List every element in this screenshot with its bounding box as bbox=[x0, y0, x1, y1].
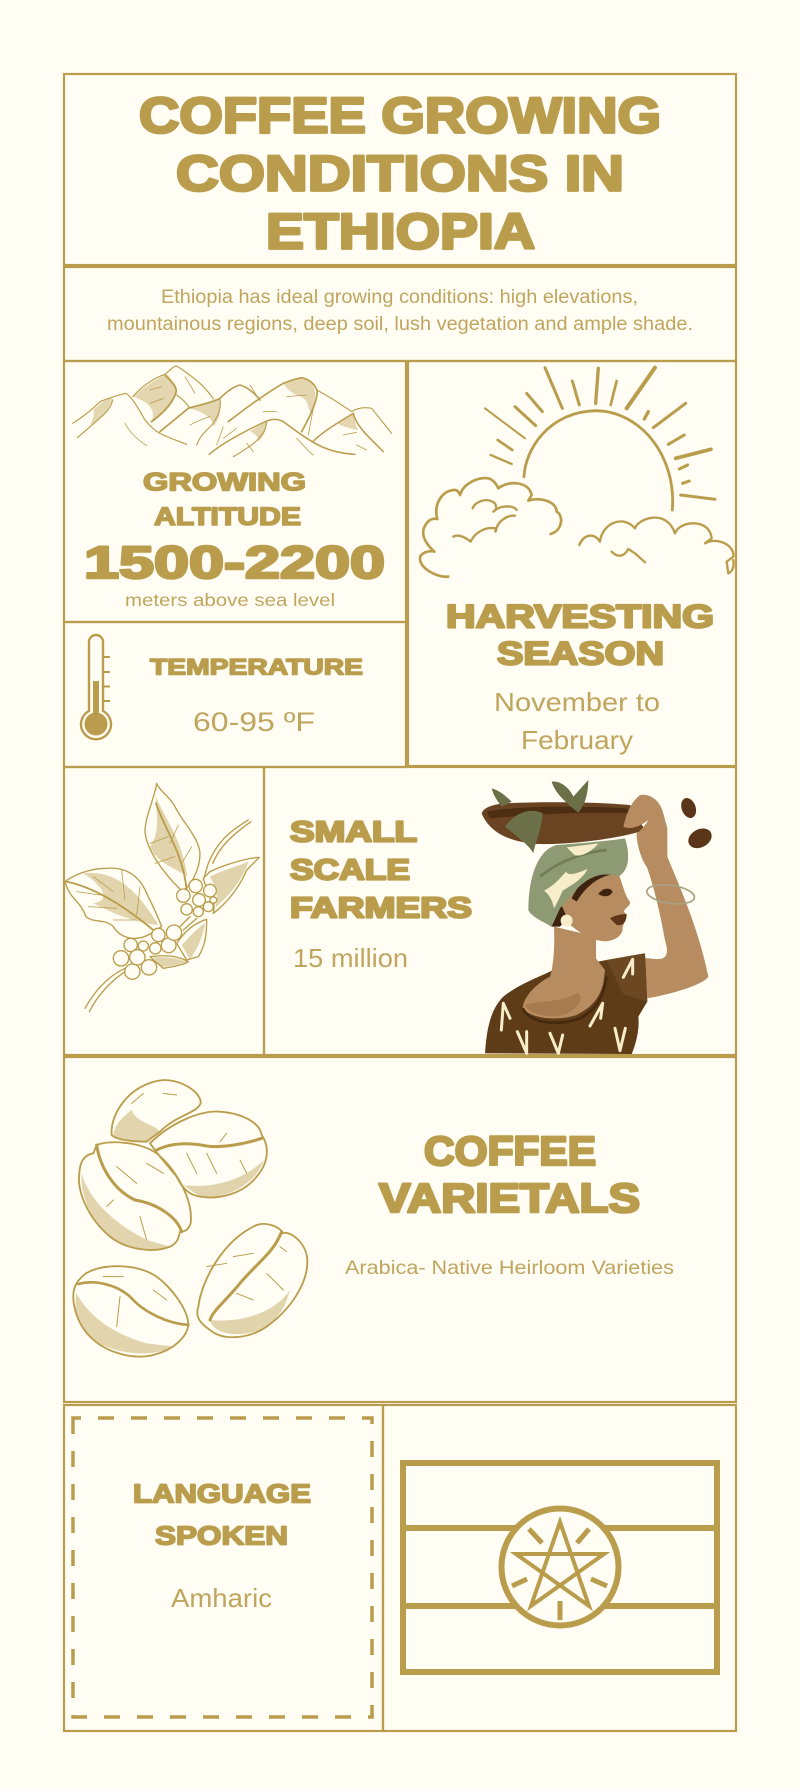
heading: harvesting season: HARVESTING bbox=[446, 598, 714, 634]
heading: coffee varietals: VARIETALS bbox=[379, 1175, 640, 1221]
value: number of farmers: 15 million bbox=[293, 943, 408, 973]
dashed inner frame bbox=[73, 1418, 372, 1717]
heading: language spoken: SPOKEN bbox=[155, 1520, 288, 1550]
heading: coffee varietals bbox=[379, 1128, 640, 1221]
icon: thermometer bbox=[81, 635, 111, 739]
panel: temperature bbox=[64, 622, 406, 767]
panel: title bbox=[64, 74, 736, 265]
heading: language spoken: LANGUAGE bbox=[133, 1478, 311, 1508]
panel: language spoken bbox=[64, 1405, 383, 1731]
heading: small scale farmers bbox=[290, 816, 472, 924]
title bbox=[139, 88, 661, 260]
icon: mountains bbox=[73, 366, 392, 457]
intro text bbox=[107, 287, 693, 335]
heading: small scale farmers: SMALL bbox=[290, 816, 417, 848]
heading: harvesting season: SEASON bbox=[497, 636, 664, 672]
icon: coffee beans bbox=[73, 1080, 307, 1357]
illustration: woman carrying coffee basket bbox=[482, 780, 715, 1054]
panel: coffee branch bbox=[64, 767, 264, 1055]
value: harvest months: November to bbox=[494, 687, 660, 717]
value: temperature range: 60-95 ºF bbox=[193, 707, 315, 737]
caption: altitude unit: meters above sea level bbox=[125, 590, 335, 610]
panel: ethiopian flag bbox=[383, 1405, 736, 1731]
intro text: Ethiopia has ideal growing conditions: high elevations, bbox=[161, 287, 638, 308]
panel: coffee varietals bbox=[64, 1057, 736, 1402]
value: varieties: Arabica- Native Heirloom Varieties bbox=[345, 1257, 674, 1279]
value: language: Amharic bbox=[171, 1583, 272, 1613]
title: COFFEE GROWING bbox=[139, 88, 661, 144]
heading: language spoken bbox=[133, 1478, 311, 1550]
heading: small scale farmers: SCALE bbox=[290, 854, 410, 886]
heading: harvesting season bbox=[446, 598, 714, 672]
icon: coffee branch bbox=[65, 783, 259, 1012]
panel: small scale farmers bbox=[264, 767, 736, 1055]
heading: temperature: TEMPERATURE bbox=[150, 654, 363, 680]
intro text: mountainous regions, deep soil, lush vegetation and ample shade. bbox=[107, 314, 693, 335]
value: altitude range: 1500-2200 bbox=[84, 537, 385, 588]
value: harvest months: February bbox=[521, 725, 633, 755]
heading: growing altitude bbox=[143, 468, 306, 531]
heading: small scale farmers: FARMERS bbox=[290, 892, 472, 924]
value: harvest months bbox=[494, 687, 660, 755]
heading: coffee varietals: COFFEE bbox=[424, 1128, 596, 1174]
icon: flag of Ethiopia bbox=[403, 1463, 717, 1672]
icon: sun and clouds bbox=[420, 368, 734, 577]
panel: harvesting season bbox=[408, 361, 736, 766]
heading: growing altitude: GROWING bbox=[143, 468, 306, 496]
title: ETHIOPIA bbox=[266, 204, 535, 260]
heading: growing altitude: ALTITUDE bbox=[154, 503, 301, 531]
panel: growing altitude bbox=[64, 361, 406, 622]
panel: introduction bbox=[64, 267, 736, 361]
title: CONDITIONS IN bbox=[176, 146, 624, 202]
